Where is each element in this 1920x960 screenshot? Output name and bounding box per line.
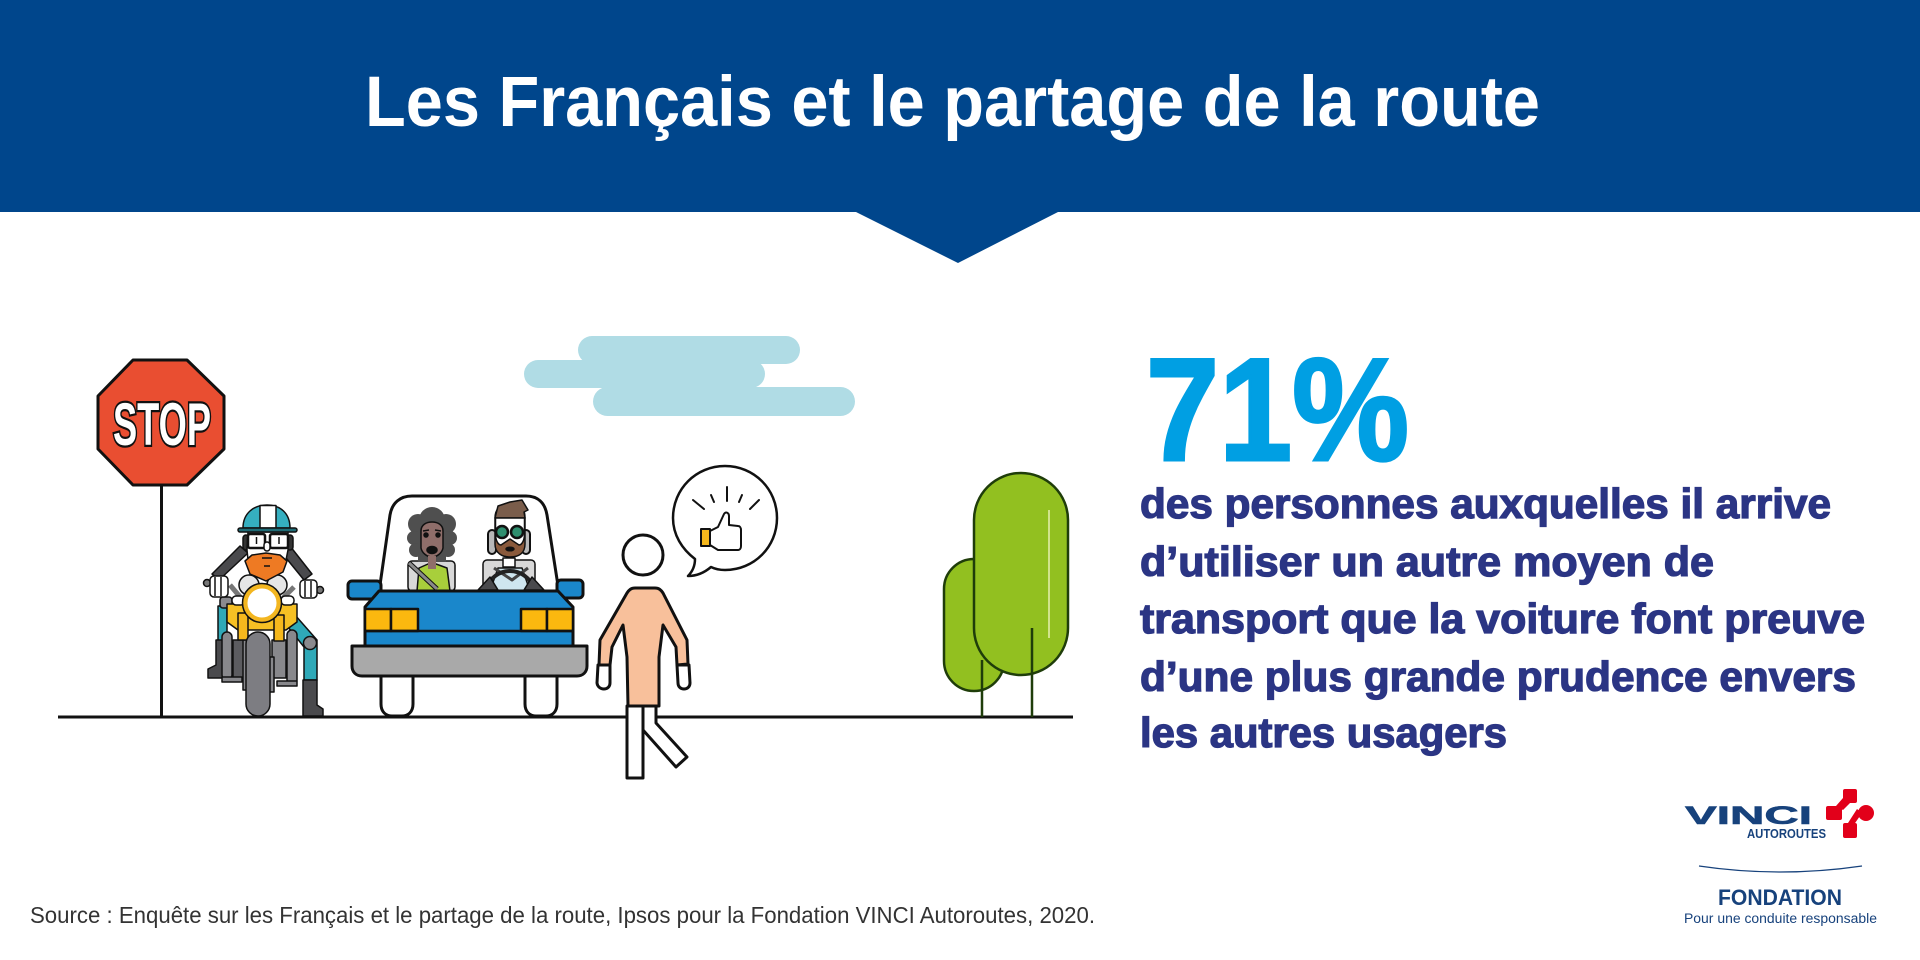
side mirrors [348, 580, 583, 599]
logo: VINCI Autoroutes Fondation [1684, 789, 1877, 926]
bumper [352, 646, 587, 676]
bubble [673, 466, 777, 576]
statistic description: d’utiliser un autre moyen de [1140, 538, 1714, 585]
hands [597, 665, 690, 689]
clouds [524, 336, 855, 416]
rider face [243, 532, 293, 581]
arc [1699, 866, 1862, 872]
thumb icon [710, 513, 741, 550]
AUTOROUTES: AUTOROUTES [1747, 826, 1826, 841]
trees [944, 473, 1068, 717]
head [623, 535, 663, 575]
title: Les Français et le partage de la route [365, 63, 1540, 142]
car [348, 496, 587, 716]
statistic: 71% [1146, 328, 1409, 491]
red logo mark [1826, 789, 1874, 838]
passenger [407, 507, 457, 591]
motorcycle [220, 575, 297, 716]
speech bubble with thumb up [673, 466, 777, 576]
windshield [379, 496, 559, 592]
statistic description [1140, 480, 1865, 756]
body [599, 588, 688, 706]
small tree [944, 559, 1004, 691]
trunks [982, 628, 1032, 717]
source: Source : Enquête sur les Français et le partage de la route, Ipsos pour la Fondation VINCI Autoroutes, 2020. [30, 902, 1095, 928]
stop sign: STOP [113, 391, 211, 458]
illustration: road scene [58, 336, 1073, 778]
rays [693, 487, 759, 509]
statistic description: transport que la voiture font preuve [1140, 595, 1865, 642]
rider legs and boots [208, 606, 323, 716]
FONDATION: FONDATION [1718, 885, 1842, 910]
large tree [974, 473, 1068, 675]
VINCI wordmark: VINCI [1685, 802, 1812, 830]
gloves [204, 576, 324, 598]
header banner [0, 0, 1920, 263]
statistic description: des personnes auxquelles il arrive [1140, 480, 1831, 527]
helmet [238, 505, 297, 532]
highlight [1048, 510, 1050, 638]
legs [627, 706, 687, 778]
cuff [701, 529, 710, 546]
motorcyclist [204, 505, 324, 716]
tagline: Pour une conduite responsable [1684, 911, 1877, 926]
statistic description: d’une plus grande prudence envers [1140, 653, 1856, 700]
stop sign [98, 360, 224, 717]
ground line [58, 716, 1073, 718]
statistic description: les autres usagers [1140, 709, 1507, 756]
car wheels [381, 676, 557, 716]
headlights [365, 609, 573, 631]
pedestrian [597, 535, 690, 778]
driver [478, 500, 544, 591]
rider arms [212, 546, 312, 580]
car body [365, 591, 573, 646]
